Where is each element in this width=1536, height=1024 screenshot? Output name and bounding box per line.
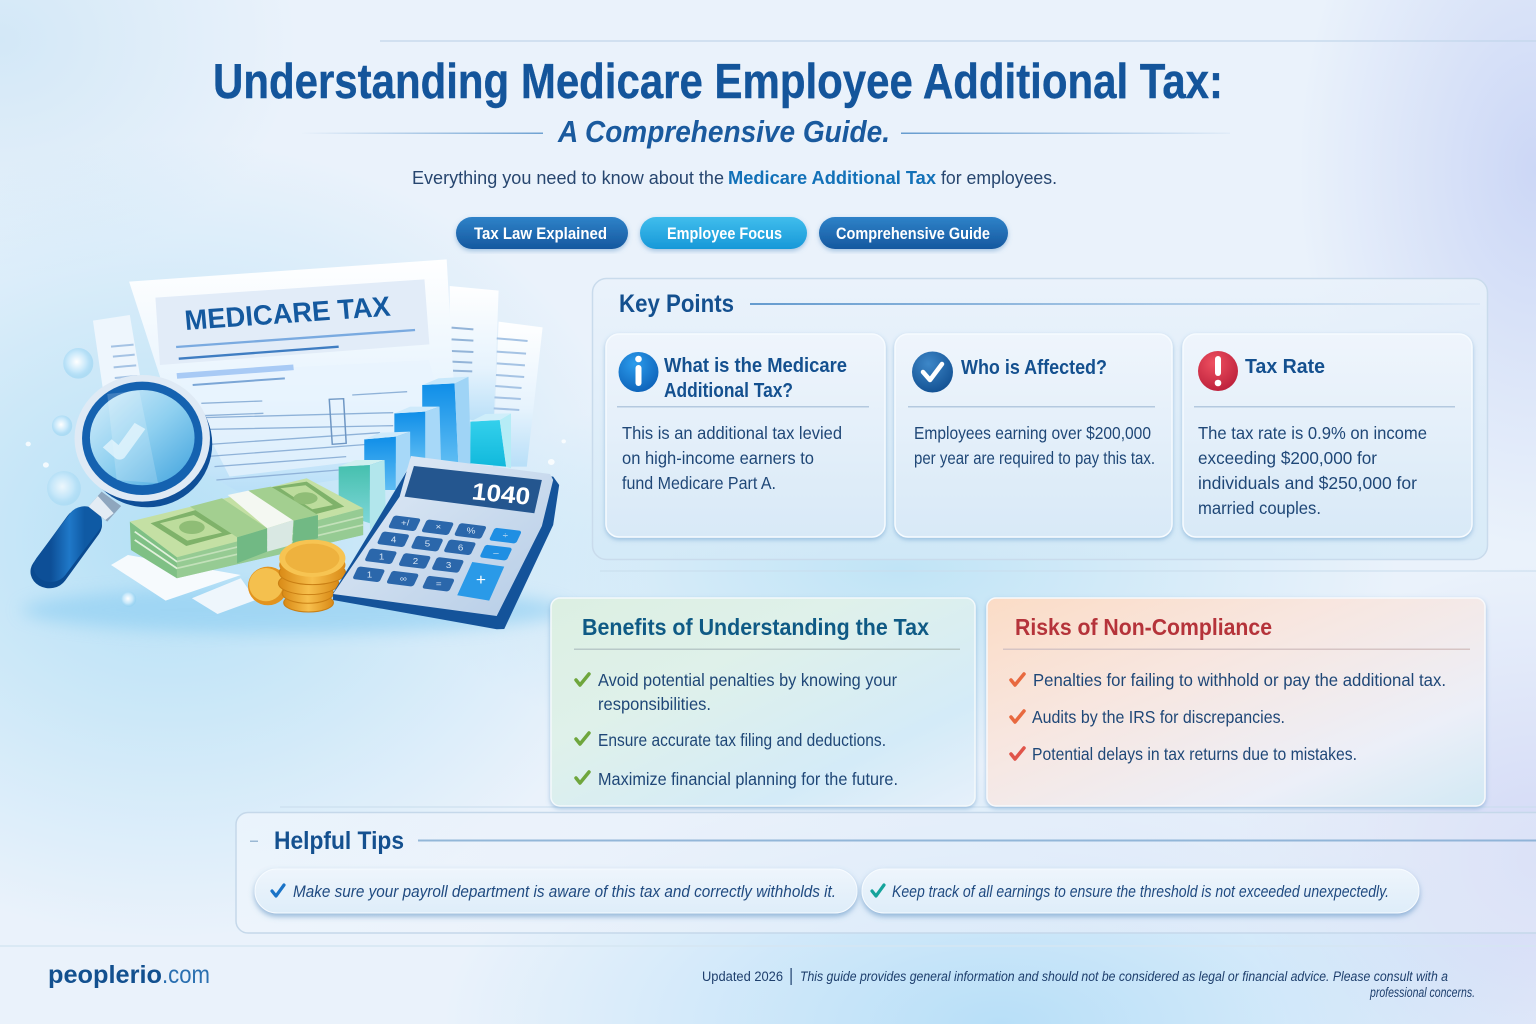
calculator keys: 4 bbox=[391, 535, 396, 544]
card: what is the tax bbox=[606, 334, 885, 537]
calculator keys: + bbox=[476, 572, 486, 589]
receipts under money bbox=[111, 555, 256, 614]
tag pills bbox=[456, 217, 1008, 249]
calculator keys: 3 bbox=[446, 560, 451, 570]
pill: comprehensive guide: Comprehensive Guide bbox=[836, 225, 990, 243]
card text: per year are required to pay this tax. bbox=[914, 448, 1155, 468]
panel: helpful tips bbox=[236, 812, 1536, 933]
calculator keys: +/ bbox=[401, 518, 410, 528]
benefit list: Maximize financial planning for the future. bbox=[598, 769, 898, 789]
risk list: Potential delays in tax returns due to mistakes. bbox=[1032, 744, 1357, 764]
card text bbox=[914, 423, 1155, 468]
calculator: 1040 bbox=[470, 479, 532, 510]
calculator keys: 1 bbox=[379, 552, 384, 561]
gold coins bbox=[248, 540, 345, 612]
risk list: Penalties for failing to withhold or pay the additional tax. bbox=[1033, 670, 1446, 690]
back paper left bbox=[93, 315, 143, 393]
card text: fund Medicare Part A. bbox=[622, 473, 776, 493]
panel: key points bbox=[592, 278, 1488, 560]
calculator keys: = bbox=[436, 579, 442, 589]
bar chart bbox=[339, 377, 511, 530]
card text bbox=[1198, 423, 1427, 518]
calculator keys: – bbox=[493, 548, 500, 557]
footer logo: .com bbox=[162, 961, 210, 989]
footer logo bbox=[48, 961, 210, 989]
pill: tax law explained: Tax Law Explained bbox=[474, 225, 607, 243]
card text bbox=[622, 423, 842, 493]
risk list: Audits by the IRS for discrepancies. bbox=[1032, 707, 1285, 727]
card heading: Additional Tax? bbox=[664, 380, 793, 402]
icon: alert bbox=[1198, 351, 1238, 391]
pill: tax law explained bbox=[456, 217, 628, 249]
tip pill: earnings bbox=[862, 869, 1419, 913]
intro sentence: Medicare Additional Tax bbox=[728, 167, 937, 188]
footer disclaimer: Updated 2026 bbox=[702, 969, 783, 984]
card text: This is an additional tax levied bbox=[622, 423, 842, 443]
tip pill: earnings: Keep track of all earnings to ensure the threshold is not exceeded unexpectedly. bbox=[892, 882, 1389, 901]
risk list bbox=[1011, 670, 1446, 764]
calculator keys: 5 bbox=[425, 539, 430, 549]
intro sentence: Everything you need to know about the bbox=[412, 167, 724, 188]
benefit list: Ensure accurate tax filing and deductions. bbox=[598, 730, 886, 750]
panel: risks bbox=[987, 598, 1485, 806]
calculator keys: 1 bbox=[367, 570, 372, 579]
pill: employee focus: Employee Focus bbox=[667, 225, 782, 243]
calculator keys: % bbox=[467, 526, 475, 535]
icon: check bbox=[912, 352, 953, 392]
benefits heading: Benefits of Understanding the Tax bbox=[582, 614, 929, 640]
icon: info bbox=[618, 352, 658, 392]
subtitle with side rules: A Comprehensive Guide. bbox=[557, 114, 890, 149]
key points heading: Key Points bbox=[619, 290, 734, 318]
calculator keys: × bbox=[436, 522, 441, 532]
card heading: What is the Medicare bbox=[664, 355, 847, 377]
card text: The tax rate is 0.9% on income bbox=[1198, 423, 1427, 443]
panel: benefits bbox=[551, 598, 975, 806]
card heading: Who is Affected? bbox=[961, 357, 1107, 379]
pill: comprehensive guide bbox=[819, 217, 1008, 249]
card heading: Tax Rate bbox=[1245, 356, 1325, 378]
calculator keys: 6 bbox=[458, 543, 463, 552]
risks heading: Risks of Non-Compliance bbox=[1015, 614, 1272, 640]
illustration: tax documents, magnifier, money, coins and calculator bbox=[23, 259, 566, 633]
card: who is affected bbox=[895, 334, 1172, 537]
tip pill: payroll bbox=[255, 869, 857, 913]
calculator bbox=[333, 456, 559, 629]
magnifying glass bbox=[49, 375, 212, 572]
card heading bbox=[664, 355, 847, 402]
footer disclaimer bbox=[702, 968, 1475, 1000]
card text: Employees earning over $200,000 bbox=[914, 423, 1151, 443]
cash stack bbox=[130, 478, 363, 578]
card text: married couples. bbox=[1198, 498, 1321, 518]
calculator keys: ÷ bbox=[503, 530, 508, 540]
calculator keys bbox=[352, 515, 522, 601]
footer logo: peoplerio bbox=[48, 961, 162, 989]
calculator keys: ∞ bbox=[400, 574, 407, 584]
benefit list bbox=[576, 670, 898, 789]
card text: individuals and $250,000 for bbox=[1198, 473, 1417, 493]
back paper right two bbox=[493, 322, 543, 467]
calculator keys: 2 bbox=[413, 556, 418, 566]
main paper bbox=[129, 259, 458, 493]
tip pill: payroll: Make sure your payroll department is aware of this tax and correctly withholds it. bbox=[293, 882, 836, 901]
benefit list: responsibilities. bbox=[598, 694, 711, 714]
card: tax rate bbox=[1183, 334, 1472, 537]
card text: exceeding $200,000 for bbox=[1198, 448, 1377, 468]
main paper: MEDICARE TAX bbox=[183, 291, 392, 337]
footer disclaimer: This guide provides general information and should not be considered as legal or financial advice. Please consult with a bbox=[800, 969, 1448, 984]
benefit list: Avoid potential penalties by knowing your bbox=[598, 670, 897, 690]
card text: on high-income earners to bbox=[622, 448, 814, 468]
title: Understanding Medicare Employee Additional Tax: bbox=[213, 55, 1223, 109]
intro sentence bbox=[412, 167, 1057, 188]
helpful tips heading: Helpful Tips bbox=[274, 827, 404, 855]
footer disclaimer: professional concerns. bbox=[1369, 985, 1475, 1000]
pill: employee focus bbox=[640, 217, 807, 249]
intro sentence: for employees. bbox=[941, 167, 1057, 188]
back paper right one bbox=[450, 286, 499, 423]
